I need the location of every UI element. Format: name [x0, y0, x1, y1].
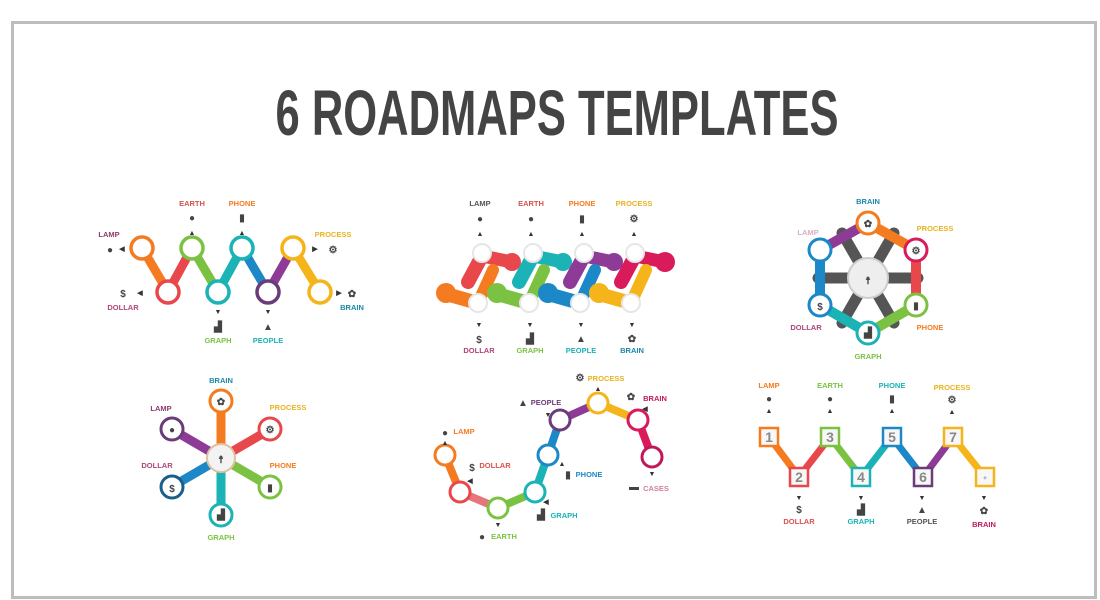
panel: hexagon flower 3: GRAPH [854, 352, 882, 361]
panel: molecule roadmap 2: ▮ [579, 214, 585, 225]
panel: molecule roadmap 2: PHONE [569, 199, 595, 208]
panel: wave roadmap 5: ▲ [442, 440, 448, 447]
panel: molecule roadmap 2: ▲ [528, 231, 534, 238]
panel: radial star 4: ⚙ [266, 425, 275, 436]
panel: zigzag roadmap 1: ▶ [335, 290, 342, 297]
panel: molecule roadmap 2: ▼ [476, 322, 482, 329]
panel: zigzag roadmap 1: ▶ [311, 246, 318, 253]
panel: molecule roadmap 2: ▲ [477, 231, 483, 238]
panel: wave roadmap 5: ▲ [518, 398, 528, 409]
panel: wave roadmap 5: ◀ [641, 406, 648, 413]
panel: molecule roadmap 2: EARTH [518, 199, 544, 208]
panel: wave roadmap 5: $ [469, 463, 475, 474]
panel: numbered boxes roadmap 6: ▲ [766, 408, 772, 415]
panel: zigzag roadmap 1: GRAPH [204, 336, 232, 345]
panel: numbered boxes roadmap 6: PHONE [879, 381, 905, 390]
panel: molecule roadmap 2: ● [528, 214, 534, 225]
panel: wave roadmap 5: ✿ [627, 392, 636, 403]
panel: numbered boxes roadmap 6: GRAPH [847, 517, 875, 526]
panel: radial star 4: ● [169, 425, 175, 436]
panel: numbered boxes roadmap 6 [758, 381, 996, 529]
panel: zigzag roadmap 1: $ [120, 289, 126, 300]
panel: wave roadmap 5: PEOPLE [531, 398, 561, 407]
title: 6 ROADMAPS TEMPLATES [276, 77, 838, 149]
panel: zigzag roadmap 1: BRAIN [340, 303, 364, 312]
panel: wave roadmap 5: ▼ [545, 412, 551, 419]
panel: hexagon flower 3: BRAIN [856, 197, 880, 206]
panel: radial star 4: ☨ [218, 455, 224, 466]
panel: hexagon flower 3: ▮ [913, 301, 919, 312]
panel: wave roadmap 5: BRAIN [643, 394, 667, 403]
panel: numbered boxes roadmap 6: ● [827, 394, 833, 405]
panel: molecule roadmap 2: ● [477, 214, 483, 225]
panel: hexagon flower 3: ✿ [864, 219, 873, 230]
panel: molecule roadmap 2: PEOPLE [566, 346, 596, 355]
panel: zigzag roadmap 1: PEOPLE [253, 336, 283, 345]
panel: wave roadmap 5: ◀ [542, 499, 549, 506]
panel: numbered boxes roadmap 6: ⚙ [948, 395, 957, 406]
panel: hexagon flower 3: PHONE [917, 323, 943, 332]
panel: molecule roadmap 2: ✿ [628, 334, 637, 345]
panel: numbered boxes roadmap 6: $ [796, 505, 802, 516]
panel: numbered boxes roadmap 6: ▼ [796, 495, 802, 502]
panel: hexagon flower 3: LAMP [797, 228, 819, 237]
panel: wave roadmap 5: ● [442, 428, 448, 439]
panel: molecule roadmap 2 [436, 199, 675, 355]
panel: radial star 4 [141, 376, 306, 542]
panel: numbered boxes roadmap 6: LAMP [758, 381, 780, 390]
panel: numbered boxes roadmap 6: ▼ [858, 495, 864, 502]
panel: wave roadmap 5: ● [479, 532, 485, 543]
panel: wave roadmap 5: ◀ [466, 478, 473, 485]
panel: wave roadmap 5: ▲ [559, 461, 565, 468]
panel: numbered boxes roadmap 6: ▲ [889, 408, 895, 415]
panel: molecule roadmap 2: PROCESS [616, 199, 652, 208]
panel: molecule roadmap 2: DOLLAR [463, 346, 495, 355]
panel: numbered boxes roadmap 6: ▮ [889, 394, 895, 405]
panel: numbered boxes roadmap 6: 5 [888, 429, 896, 445]
panel: numbered boxes roadmap 6: ▼ [981, 495, 987, 502]
panel: molecule roadmap 2: ▟ [525, 332, 534, 345]
panel: zigzag roadmap 1 [98, 199, 364, 345]
panel: zigzag roadmap 1: ✿ [348, 289, 357, 300]
panel: wave roadmap 5: CASES [643, 484, 669, 493]
panel: zigzag roadmap 1: ▲ [189, 230, 195, 237]
panel: molecule roadmap 2: ▼ [527, 322, 533, 329]
panel: zigzag roadmap 1: ▼ [215, 309, 221, 316]
panel: hexagon flower 3: ⚙ [912, 246, 921, 257]
panel: molecule roadmap 2: LAMP [469, 199, 491, 208]
panel: molecule roadmap 2: ▼ [578, 322, 584, 329]
panel: hexagon flower 3: PROCESS [917, 224, 953, 233]
panel: wave roadmap 5: ▼ [649, 471, 655, 478]
panel: zigzag roadmap 1: ◀ [136, 290, 143, 297]
panel: wave roadmap 5: ▼ [495, 522, 501, 529]
panel: wave roadmap 5 [435, 373, 669, 543]
panel: wave roadmap 5: ▟ [536, 508, 545, 521]
panel: wave roadmap 5: EARTH [491, 532, 517, 541]
panel: hexagon flower 3: DOLLAR [790, 323, 822, 332]
panel: molecule roadmap 2: ▲ [579, 231, 585, 238]
panel: numbered boxes roadmap 6: 6 [919, 469, 927, 485]
panel: numbered boxes roadmap 6: 2 [795, 469, 803, 485]
panel: radial star 4: ▮ [267, 483, 273, 494]
panel: molecule roadmap 2: GRAPH [516, 346, 544, 355]
panel: molecule roadmap 2: BRAIN [620, 346, 644, 355]
panel: zigzag roadmap 1: ● [107, 245, 113, 256]
panel: numbered boxes roadmap 6: EARTH [817, 381, 843, 390]
panel: radial star 4: ✿ [217, 397, 226, 408]
panel: radial star 4: GRAPH [207, 533, 235, 542]
panel: zigzag roadmap 1: DOLLAR [107, 303, 139, 312]
panel: numbered boxes roadmap 6: 1 [765, 429, 773, 445]
panel: wave roadmap 5: LAMP [453, 427, 475, 436]
panel: molecule roadmap 2: ▲ [576, 334, 586, 345]
panel: numbered boxes roadmap 6: ● [766, 394, 772, 405]
panel: radial star 4: $ [169, 484, 175, 495]
panel: numbered boxes roadmap 6: + [983, 476, 987, 482]
panel: numbered boxes roadmap 6: ▼ [919, 495, 925, 502]
panel: radial star 4: LAMP [150, 404, 172, 413]
panel: numbered boxes roadmap 6: 4 [857, 469, 865, 485]
panel: zigzag roadmap 1: ⚙ [329, 245, 338, 256]
panel: numbered boxes roadmap 6: 7 [949, 429, 957, 445]
panel: radial star 4: PHONE [270, 461, 296, 470]
panel: numbered boxes roadmap 6: DOLLAR [783, 517, 815, 526]
panel: zigzag roadmap 1: ▮ [239, 213, 245, 224]
panel: molecule roadmap 2: ▼ [629, 322, 635, 329]
panel: zigzag roadmap 1: ◀ [118, 246, 125, 253]
panel: zigzag roadmap 1: ▟ [213, 320, 222, 333]
panel: molecule roadmap 2: ▲ [631, 231, 637, 238]
panel: hexagon flower 3: $ [817, 302, 823, 313]
panel: numbered boxes roadmap 6: ✿ [980, 506, 989, 517]
panel: hexagon flower 3: ▟ [863, 326, 872, 339]
panel: wave roadmap 5: ▬ [629, 482, 639, 493]
panel: numbered boxes roadmap 6: ▟ [856, 503, 865, 516]
panel: radial star 4: DOLLAR [141, 461, 173, 470]
panel: numbered boxes roadmap 6: ▲ [917, 505, 927, 516]
panel: wave roadmap 5: DOLLAR [479, 461, 511, 470]
panel: hexagon flower 3 [790, 197, 953, 361]
panel: molecule roadmap 2: $ [476, 335, 482, 346]
panel: zigzag roadmap 1: ▼ [265, 309, 271, 316]
panel: radial star 4: PROCESS [270, 403, 306, 412]
panel: wave roadmap 5: ▮ [565, 470, 571, 481]
panel: wave roadmap 5: ⚙ [576, 373, 585, 384]
panel: zigzag roadmap 1: ▲ [263, 322, 273, 333]
panel: wave roadmap 5: ▲ [595, 386, 601, 393]
panel: wave roadmap 5: PHONE [576, 470, 602, 479]
panel: zigzag roadmap 1: ● [189, 213, 195, 224]
panel: hexagon flower 3: ☨ [865, 276, 871, 287]
panel: wave roadmap 5: PROCESS [588, 374, 624, 383]
panel: radial star 4: BRAIN [209, 376, 233, 385]
panel: radial star 4: ▟ [216, 508, 225, 521]
panel: zigzag roadmap 1: EARTH [179, 199, 205, 208]
panel: numbered boxes roadmap 6: ▲ [827, 408, 833, 415]
panel: numbered boxes roadmap 6: ▲ [949, 409, 955, 416]
panel: wave roadmap 5: GRAPH [550, 511, 578, 520]
panel: zigzag roadmap 1: ▲ [239, 230, 245, 237]
panel: zigzag roadmap 1: PHONE [229, 199, 255, 208]
panel: numbered boxes roadmap 6: 3 [826, 429, 834, 445]
panel: numbered boxes roadmap 6: PROCESS [934, 383, 970, 392]
panel: numbered boxes roadmap 6: PEOPLE [907, 517, 937, 526]
panel: zigzag roadmap 1: PROCESS [315, 230, 351, 239]
panel: molecule roadmap 2: ⚙ [630, 214, 639, 225]
panel: numbered boxes roadmap 6: BRAIN [972, 520, 996, 529]
panel: zigzag roadmap 1: LAMP [98, 230, 120, 239]
